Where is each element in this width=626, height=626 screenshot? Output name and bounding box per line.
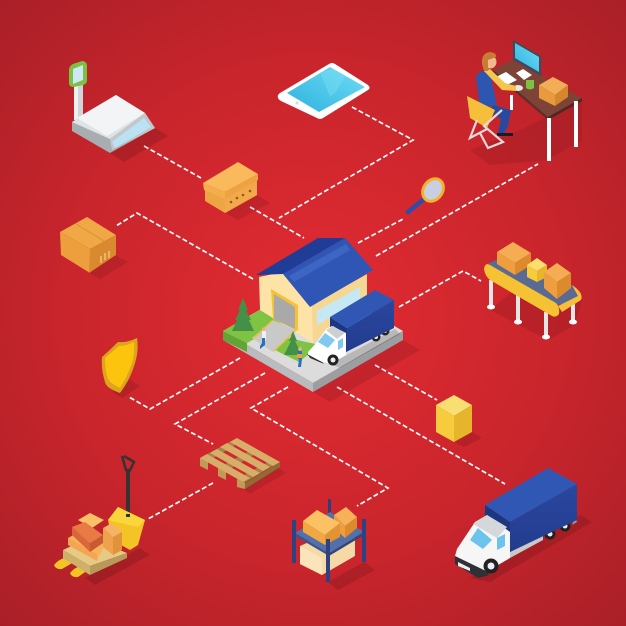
stringers	[200, 438, 274, 487]
pallet	[63, 538, 127, 575]
boxes	[68, 513, 122, 561]
icon: yellow cube box	[436, 395, 482, 447]
jack body	[108, 507, 145, 550]
front posts	[292, 519, 366, 582]
monitor	[513, 40, 541, 76]
door and ramp	[252, 289, 298, 352]
forks	[54, 558, 88, 577]
icon: worker at desk	[467, 40, 582, 165]
person	[476, 52, 516, 136]
icon: storage shelf with boxes	[292, 499, 375, 590]
roof	[256, 238, 373, 307]
icon: shield	[102, 338, 140, 398]
dashed connector lines	[116, 107, 538, 519]
big delivery truck	[455, 468, 592, 582]
chair	[467, 96, 503, 148]
desk	[493, 60, 582, 161]
boards	[200, 438, 280, 482]
boxes on shelf	[303, 507, 357, 545]
icon: weighing scale	[69, 61, 168, 162]
central warehouse	[223, 238, 420, 402]
person 1	[260, 327, 266, 349]
icon: pallet jack with boxes	[54, 456, 150, 585]
icon: magnifier	[408, 175, 448, 212]
jack handle	[122, 456, 134, 515]
icon: cardboard box middle	[203, 162, 270, 220]
person 2	[297, 347, 302, 367]
box on desk	[539, 77, 568, 106]
icon: wooden pallet	[200, 438, 286, 494]
parked truck	[307, 290, 400, 368]
house walls	[259, 272, 367, 343]
icon: large box left	[60, 217, 128, 279]
icon: conveyor belt	[484, 242, 582, 340]
platform	[223, 279, 420, 402]
beige box	[300, 535, 355, 575]
box 2	[544, 263, 571, 299]
back post	[328, 499, 331, 522]
small cube	[527, 258, 547, 282]
trees	[232, 298, 302, 355]
shelf plate	[295, 512, 364, 553]
box 1	[497, 242, 531, 275]
icon: tablet	[278, 63, 370, 119]
legs	[487, 280, 577, 340]
